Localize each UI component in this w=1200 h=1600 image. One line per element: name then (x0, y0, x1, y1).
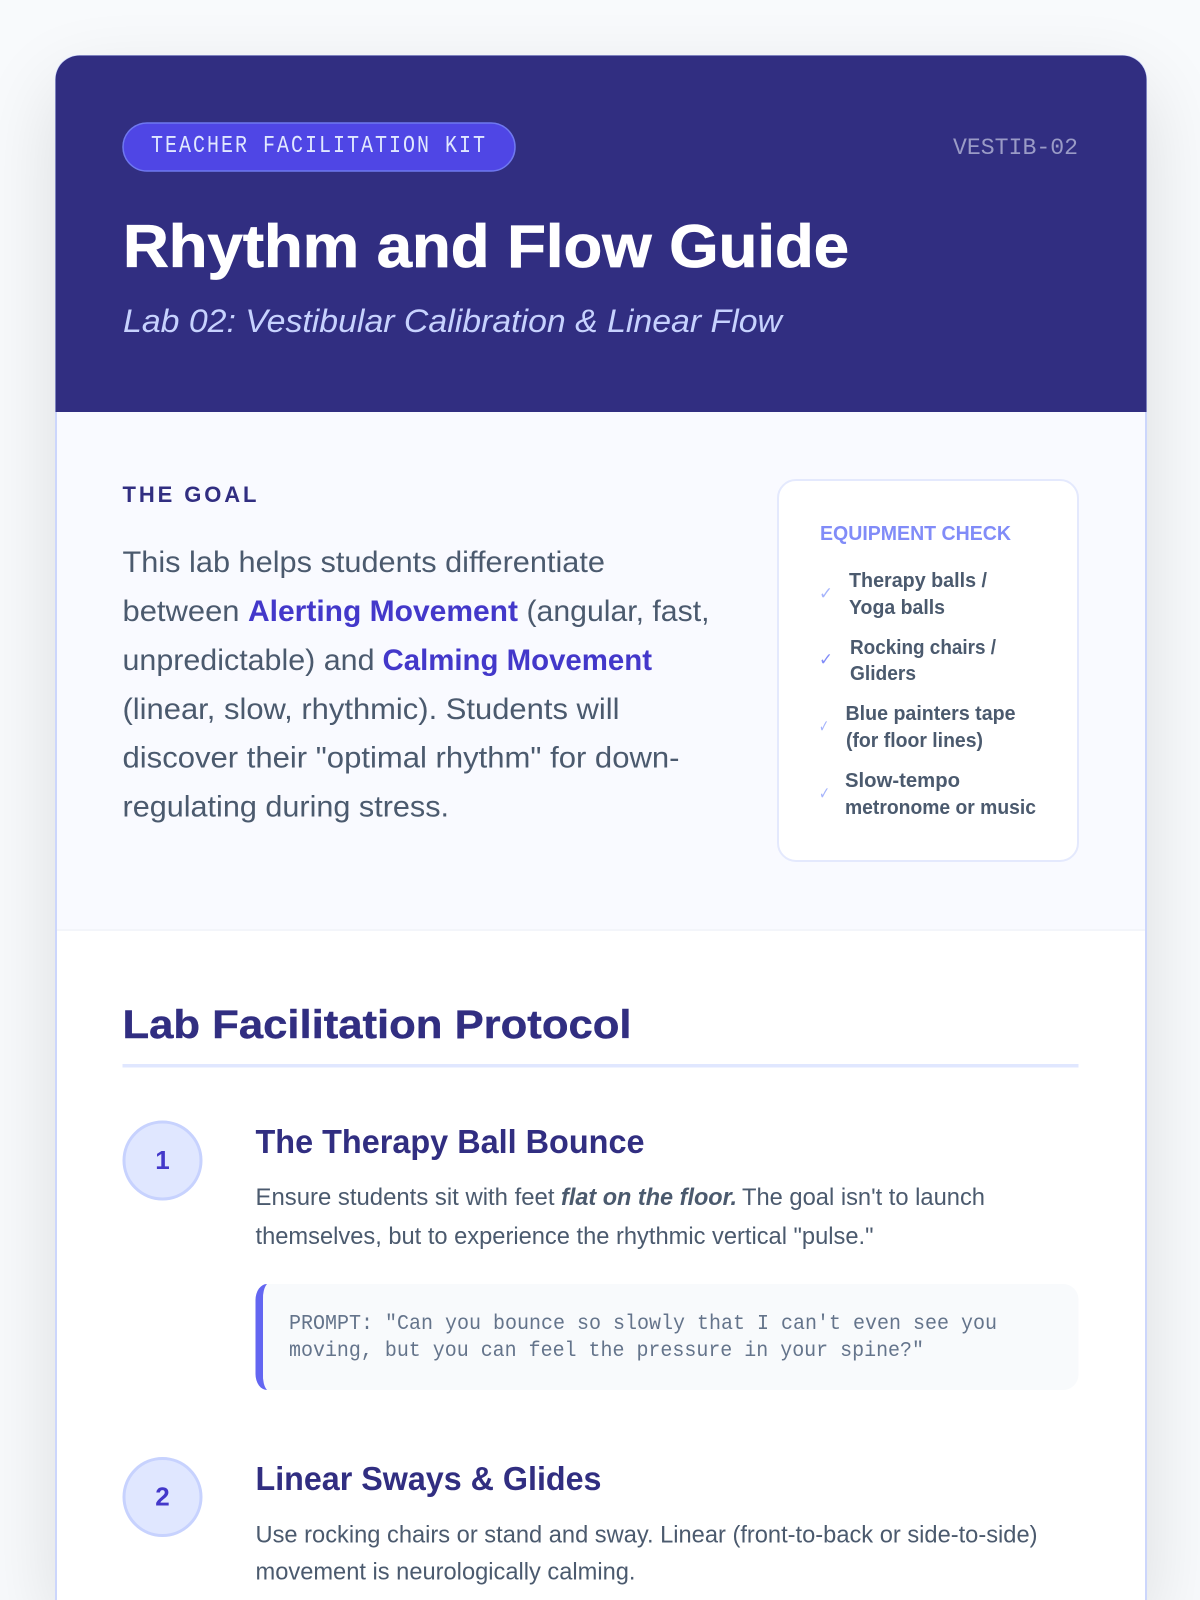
equipment item: metronome: metronome or music (845, 797, 1036, 819)
step 1 description: flat on the floor. (561, 1184, 737, 1211)
equipment heading: EQUIPMENT CHECK (820, 523, 1012, 545)
protocol heading: Lab Facilitation Protocol (122, 1003, 632, 1047)
step 1 (124, 1122, 1078, 1390)
badge: teacher facilitation kit (123, 123, 515, 171)
lab code: VESTIB-02 (953, 135, 1078, 162)
panel: protocol (122, 1003, 1078, 1586)
badge: teacher facilitation kit: TEACHER FACILITATION KIT (151, 133, 485, 160)
equipment item: rocking chairs (819, 637, 996, 685)
step 2 number (124, 1458, 201, 1536)
panel: equipment check (778, 480, 1078, 861)
equipment item: therapy balls: ✓ (819, 584, 833, 604)
goal paragraph: regulating during stress. (122, 790, 449, 824)
equipment item: therapy balls: Therapy balls / (849, 570, 987, 592)
equipment item: painters tape: (for floor lines) (846, 730, 983, 752)
equipment item: rocking chairs: Rocking chairs / (850, 637, 996, 659)
goal paragraph: (angular, fast, (526, 595, 710, 628)
subtitle: Lab 02: Vestibular Calibration & Linear Flow (123, 303, 784, 339)
panel: the goal (57, 412, 1145, 931)
equipment item: metronome (819, 770, 1036, 819)
step 1 number: 1 (155, 1145, 170, 1175)
equipment item: painters tape: Blue painters tape (846, 703, 1016, 725)
equipment item: painters tape (819, 703, 1016, 752)
goal paragraph: unpredictable) and (122, 644, 374, 677)
goal paragraph: (linear, slow, rhythmic). Students will (122, 693, 620, 726)
equipment item: therapy balls: Yoga balls (849, 597, 945, 619)
step 2 title: Linear Sways & Glides (256, 1460, 602, 1497)
goal paragraph (122, 546, 710, 824)
step 2 (124, 1458, 1038, 1586)
title: Rhythm and Flow Guide (123, 213, 849, 280)
step 2 description: movement is neurologically calming. (256, 1558, 636, 1586)
goal heading: THE GOAL (122, 482, 256, 507)
step 1 description: themselves, but to experience the rhythmic vertical "pulse." (256, 1223, 874, 1250)
goal paragraph: discover their "optimal rhythm" for down- (122, 742, 680, 774)
equipment item: rocking chairs: ✓ (819, 650, 833, 670)
equipment item: metronome: Slow-tempo (845, 770, 960, 792)
step 1 prompt: moving, but you can feel the pressure in your spine?" (289, 1340, 924, 1363)
equipment item: painters tape: ✓ (819, 717, 829, 737)
goal paragraph: between (122, 595, 240, 628)
equipment item: rocking chairs: Gliders (850, 663, 916, 685)
step 1 number (124, 1122, 201, 1199)
step 2 description (256, 1522, 1038, 1586)
goal paragraph: Calming Movement (382, 644, 652, 677)
step 1 title: The Therapy Ball Bounce (256, 1123, 644, 1160)
step 1 description: The goal isn't to launch (742, 1184, 985, 1211)
equipment item: metronome: ✓ (819, 784, 830, 804)
step 1 prompt (256, 1284, 1078, 1390)
equipment item: therapy balls (819, 570, 987, 619)
goal paragraph: Alerting Movement (248, 595, 518, 628)
step 1 description (256, 1184, 985, 1250)
step 1 prompt: PROMPT: "Can you bounce so slowly that I can't even see you (289, 1313, 997, 1336)
step 2 number: 2 (155, 1482, 170, 1512)
step 1 description: Ensure students sit with feet (256, 1184, 555, 1211)
step 2 description: Use rocking chairs or stand and sway. Linear (front-to-back or side-to-side) (256, 1522, 1038, 1548)
panel: header (56, 56, 1146, 412)
goal paragraph: This lab helps students differentiate (122, 546, 605, 579)
